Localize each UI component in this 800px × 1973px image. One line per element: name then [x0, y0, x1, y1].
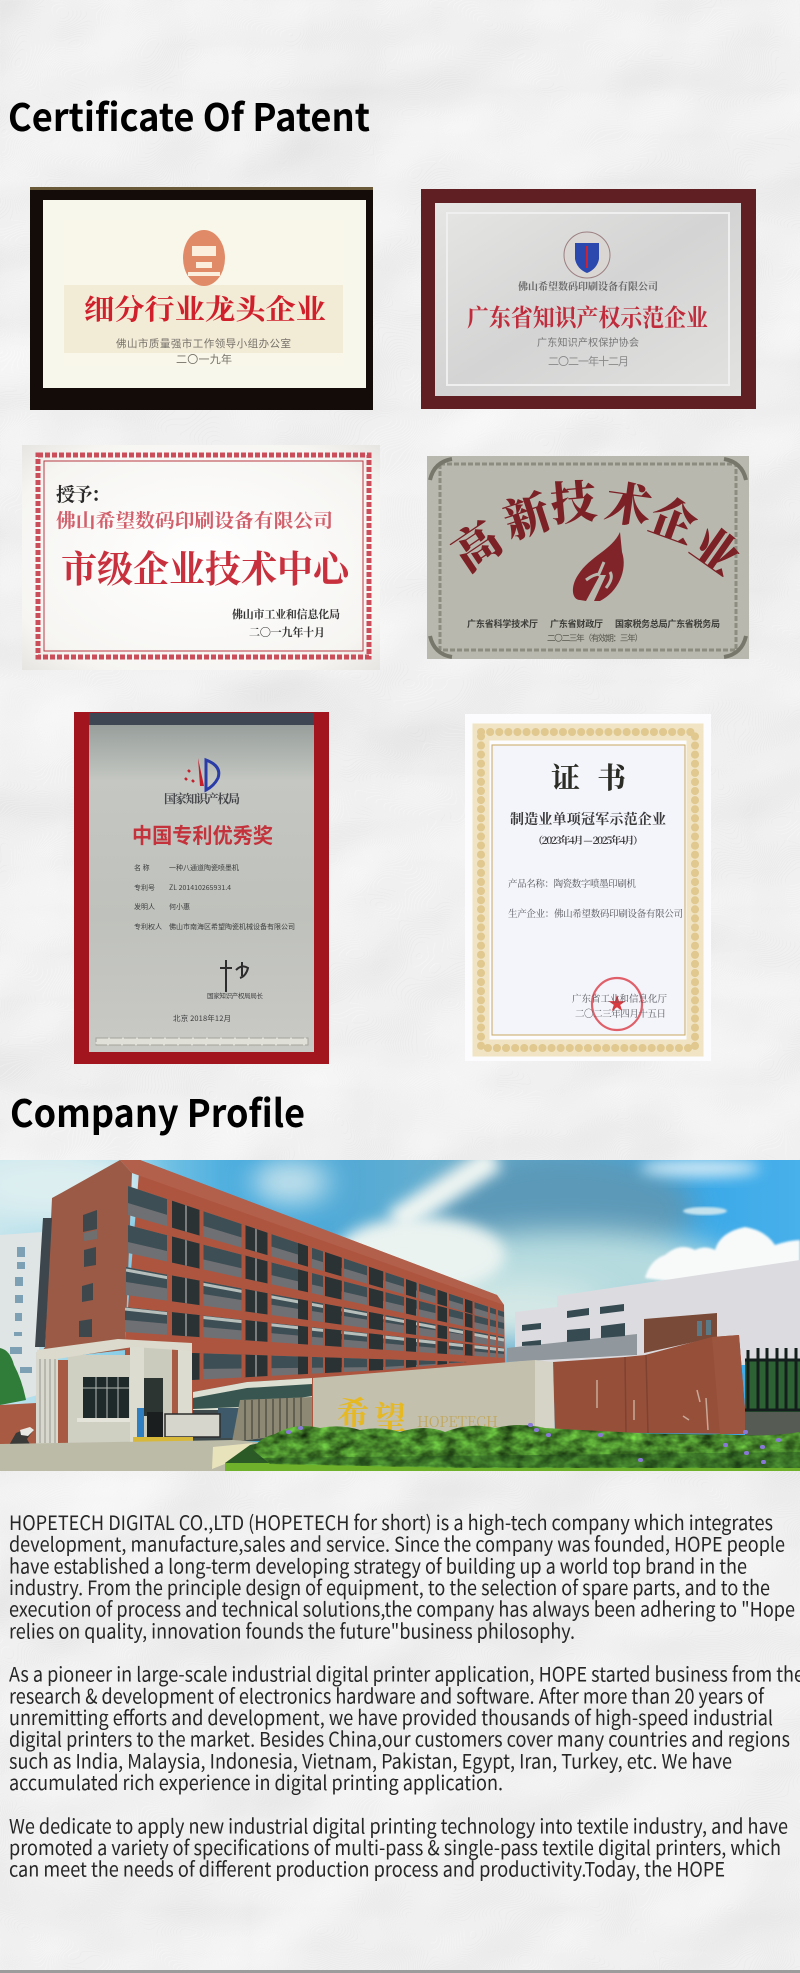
certificate 5: China patent excellence award plaque: 国家知识产权局 [164, 790, 240, 807]
gatehouse [36, 1339, 220, 1445]
certificate 3: certificate with red Greek border: 佛山市工业和信息化局 [232, 606, 340, 622]
certificate 2: plaque with maroon frame: 佛山希望数码印刷设备有限公司 [518, 278, 658, 293]
certificate 5: China patent excellence award plaque: 佛山市南海区希望陶瓷机械设备有限公司 [169, 922, 295, 932]
certificate 5: China patent excellence award plaque: 何小惠 [169, 902, 190, 912]
company profile text: paragraph 3: can meet the needs of different production process and productivity.Today, the HOPE [9, 1854, 725, 1883]
certificate 2: plaque with maroon frame [421, 189, 756, 409]
certificate 4: grey high-tech enterprise certificate: 术 [601, 466, 656, 538]
certificate 6: manufacturing champion certificate with gold border [465, 714, 711, 1061]
company profile text: paragraph 2: accumulated rich experience in digital printing application. [9, 1767, 503, 1796]
stamp: ★ [608, 990, 626, 1016]
certificate 6: manufacturing champion certificate with gold border: （2023年4月 — 2025年4月） [533, 832, 643, 847]
certificate 4: grey high-tech enterprise certificate: 国家税务总局广东省税务局 [615, 617, 720, 630]
certificate 5: China patent excellence award plaque: ZL 201410265931.4 [169, 883, 231, 893]
certificate 2: plaque with maroon frame: 广东省知识产权示范企业 [467, 298, 708, 333]
certificate 1: plaque with black frame [30, 187, 373, 410]
certificate 5: China patent excellence award plaque: 专利号 [134, 883, 155, 893]
certificate 4: grey high-tech enterprise certificate: 企 [642, 479, 707, 557]
right brick wall [553, 1335, 747, 1434]
certificate 4: grey high-tech enterprise certificate: 广东省财政厅 [550, 617, 603, 630]
factory: white hall [507, 1260, 800, 1365]
grass strip [225, 1463, 800, 1471]
clouds [0, 1145, 800, 1340]
sliding gate [232, 1397, 312, 1442]
main brick building [35, 1160, 510, 1440]
certificate 4: grey high-tech enterprise certificate: 二〇二三年（有效期：三年） [547, 632, 643, 644]
heading: Company Profile: Company Profile [10, 1083, 305, 1138]
certificate 5: China patent excellence award plaque: 中国专利优秀奖 [132, 820, 273, 850]
sign wall lettering: 望 [374, 1393, 406, 1439]
company profile text: paragraph 2: such as India, Malaysia, Indonesia, Vietnam, Pakistan, Egypt, Iran, Turkey, etc. We have [9, 1745, 732, 1774]
ground behind hedge [225, 1432, 800, 1463]
company profile text: paragraph 2 [9, 1659, 800, 1796]
heading: Certificate Of Patent: Certificate Of Patent [8, 87, 370, 142]
sign wall lettering [337, 1388, 498, 1439]
photo: company headquarters building [0, 1160, 800, 1471]
bottom edge line [0, 1970, 800, 1973]
company profile text: paragraph 1: relies on quality, innovation founds the future"business philosophy. [9, 1615, 575, 1644]
certificate 6: manufacturing champion certificate with gold border: 产品名称：陶瓷数字喷墨印刷机 [508, 876, 636, 890]
certificate 5: China patent excellence award plaque: 名 称 [134, 863, 150, 873]
certificate 6: manufacturing champion certificate with gold border: 制造业单项冠军示范企业 [510, 809, 666, 829]
certificate 3: certificate with red Greek border: 授予： [56, 480, 110, 507]
certificate 6: manufacturing champion certificate with gold border: 书 [597, 756, 627, 797]
certificate 4: grey high-tech enterprise certificate: 高 [438, 504, 513, 584]
stamp [592, 978, 642, 1030]
certificate 3: certificate with red Greek border: 市级企业技术中心 [61, 539, 354, 593]
certificate 1: plaque with black frame: 二〇一九年 [176, 351, 232, 367]
certificate 5: China patent excellence award plaque: 专利权人 [134, 922, 162, 932]
certificate 4: grey high-tech enterprise certificate: 业 [679, 508, 755, 589]
certificate 4: grey high-tech enterprise certificate: 技 [548, 465, 599, 535]
certificate 6: manufacturing champion certificate with gold border: 广东省工业和信息化厅 [572, 991, 667, 1005]
hedge and flowers [253, 1425, 800, 1468]
sign wall lettering: HOPETECH [417, 1411, 498, 1432]
side white building [0, 1232, 42, 1405]
iron fence [745, 1348, 800, 1440]
stone sign wall [313, 1360, 555, 1440]
sign wall lettering: 希 [337, 1388, 369, 1434]
certificate 3: certificate with red Greek border: 二〇一九年十月 [249, 624, 325, 640]
certificate 2: plaque with maroon frame: 广东知识产权保护协会 [537, 334, 639, 349]
certificate 5: China patent excellence award plaque [74, 712, 329, 1064]
certificate 4: grey high-tech enterprise certificate [427, 456, 755, 659]
certificate 1: plaque with black frame: 佛山市质量强市工作领导小组办公室 [116, 336, 291, 351]
certificate 5: China patent excellence award plaque: 北京 2018年12月 [173, 1013, 231, 1024]
certificate 6: manufacturing champion certificate with gold border: 生产企业：佛山希望数码印刷设备有限公司 [508, 906, 683, 920]
certificate 5: China patent excellence award plaque: 一种八通道陶瓷喷墨机 [169, 863, 239, 873]
certificate 3: certificate with red Greek border [22, 445, 380, 670]
entrance road [0, 1440, 270, 1471]
certificate 5: China patent excellence award plaque: 国家知识产权局局长 [207, 990, 264, 1000]
certificate 4: grey high-tech enterprise certificate: 新 [494, 475, 558, 552]
left low wall and tree [0, 1348, 36, 1448]
company profile text: paragraph 3 [9, 1810, 788, 1883]
certificate 6: manufacturing champion certificate with gold border: 二〇二三年四月十五日 [575, 1006, 666, 1020]
curb [212, 1443, 253, 1469]
icon: patent office logo [185, 758, 219, 790]
certificate 6: manufacturing champion certificate with gold border: 证 [551, 756, 580, 797]
certificate 5: China patent excellence award plaque: 发明人 [134, 902, 155, 912]
certificate 1: plaque with black frame: 细分行业龙头企业 [84, 288, 326, 328]
certificate 2: plaque with maroon frame: 二〇二一年十二月 [548, 353, 629, 369]
certificate 3: certificate with red Greek border: 佛山希望数码印刷设备有限公司 [56, 506, 333, 533]
certificate 4: grey high-tech enterprise certificate: 广东省科学技术厅 [467, 617, 538, 630]
bus [193, 1378, 312, 1442]
company profile text: paragraph 1 [9, 1507, 795, 1644]
